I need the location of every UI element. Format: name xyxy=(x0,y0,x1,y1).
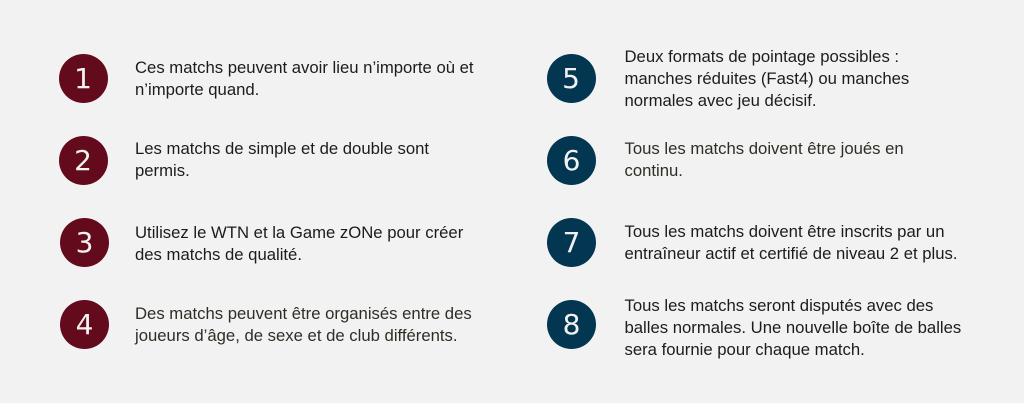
text 3: des matchs de qualité. xyxy=(135,245,302,264)
text 5: normales avec jeu décisif. xyxy=(624,91,816,110)
badge 4 xyxy=(60,300,109,348)
text 2: Les matchs de simple et de double sont xyxy=(135,139,429,158)
text 4: joueurs d’âge, de sexe et de club différents. xyxy=(135,326,458,345)
badge 4: 4 xyxy=(76,308,93,340)
text 8: balles normales. Une nouvelle boîte de balles xyxy=(624,318,961,337)
text 1 xyxy=(135,58,474,99)
text 2 xyxy=(135,139,429,180)
badge 3 xyxy=(60,218,109,266)
text 5: manches réduites (Fast4) ou manches xyxy=(624,69,909,88)
badge 1 xyxy=(58,54,108,102)
badge 5: 5 xyxy=(562,62,580,94)
badge 8: 8 xyxy=(563,308,580,340)
text 1: Ces matchs peuvent avoir lieu n’importe où et xyxy=(135,58,474,77)
text 5 xyxy=(624,47,909,110)
badge 7: 7 xyxy=(563,226,580,258)
badge 7 xyxy=(547,218,596,266)
text 6 xyxy=(624,139,904,180)
text 1: n’importe quand. xyxy=(135,80,259,99)
badge 1: 1 xyxy=(74,62,92,94)
text 7: entraîneur actif et certifié de niveau 2 et plus. xyxy=(624,244,958,263)
badge 6 xyxy=(547,136,596,184)
text 5: Deux formats de pointage possibles : xyxy=(624,47,899,66)
text 4 xyxy=(134,304,472,345)
badge 2 xyxy=(58,136,108,184)
text 4: Des matchs peuvent être organisés entre des xyxy=(135,304,472,323)
text 6: continu. xyxy=(624,161,683,180)
text 3: Utilisez le WTN et la Game zONe pour créer xyxy=(135,223,463,242)
text 8: sera fournie pour chaque match. xyxy=(624,340,865,359)
text 8 xyxy=(624,296,961,359)
text 8: Tous les matchs seront disputés avec des xyxy=(624,296,933,315)
text 2: permis. xyxy=(135,161,190,180)
text 7 xyxy=(624,222,958,263)
text 3 xyxy=(135,223,464,264)
badge 2: 2 xyxy=(74,144,92,176)
badge 6: 6 xyxy=(563,144,580,176)
badge 5 xyxy=(546,54,596,102)
text 6: Tous les matchs doivent être joués en xyxy=(624,139,904,158)
text 7: Tous les matchs doivent être inscrits par un xyxy=(624,222,944,241)
badge 3: 3 xyxy=(76,226,93,258)
badge 8 xyxy=(547,300,596,348)
